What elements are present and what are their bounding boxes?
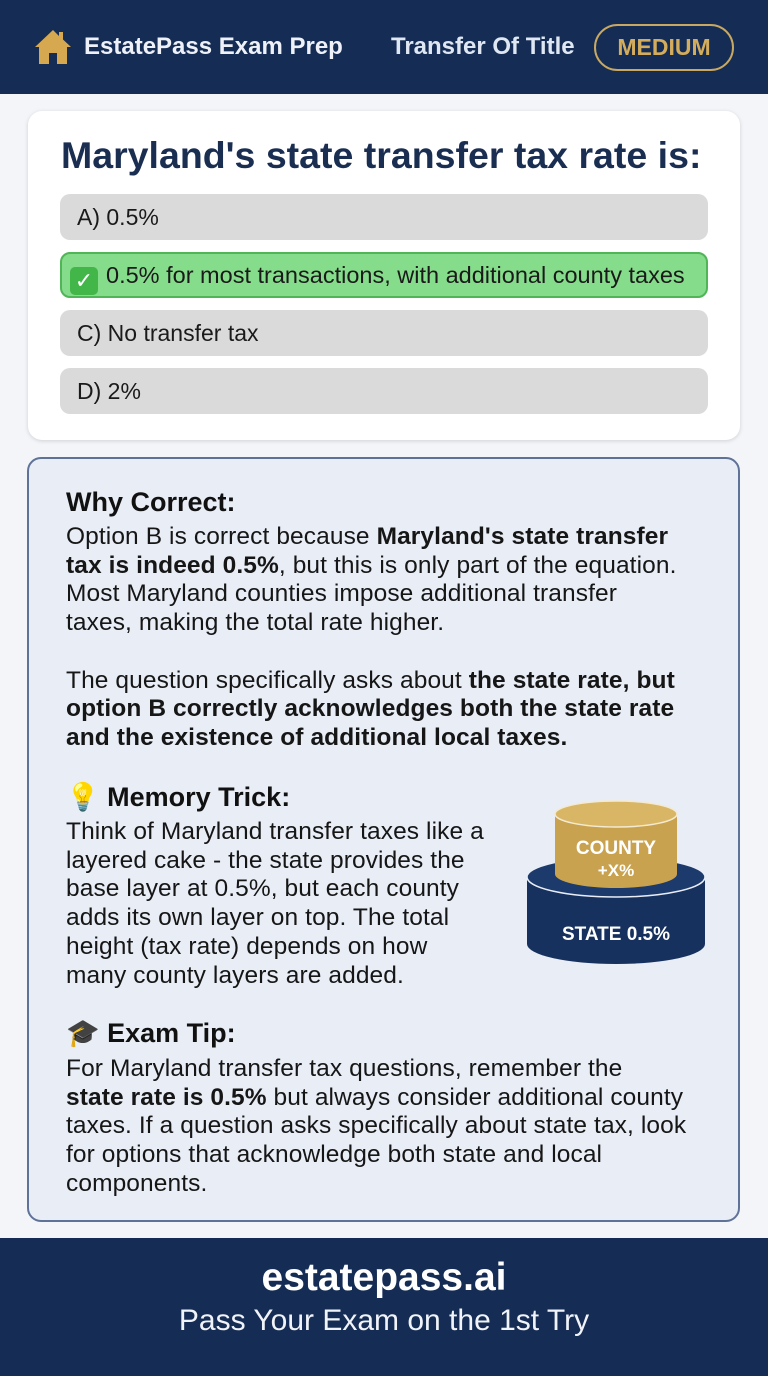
- exam tip text: For Maryland transfer tax questions, remember the: [66, 1055, 622, 1082]
- why correct heading: Why Correct:: [66, 487, 236, 517]
- option B correct: 0.5% for most transactions, with additional county taxes: [106, 262, 685, 288]
- memory trick text: layered cake - the state provides the: [66, 847, 465, 874]
- question title: Maryland's state transfer tax rate is:: [61, 134, 701, 176]
- option A: A) 0.5%: [77, 204, 159, 230]
- cake diagram: COUNTY: [576, 838, 656, 859]
- memory trick text: adds its own layer on top. The total: [66, 904, 449, 931]
- brand name: EstatePass Exam Prep: [84, 33, 343, 60]
- memory trick text: [66, 818, 484, 989]
- explanation panel: [27, 457, 740, 1222]
- memory trick text: Think of Maryland transfer taxes like a: [66, 818, 484, 845]
- why correct text: taxes, making the total rate higher.: [66, 609, 444, 636]
- difficulty badge: [594, 24, 734, 71]
- question card: [28, 111, 740, 440]
- option C: C) No transfer tax: [77, 320, 258, 346]
- option D: D) 2%: [77, 378, 141, 404]
- exam tip text: [66, 1055, 686, 1197]
- why correct text: Option B is correct because Maryland's state transfer: [66, 523, 668, 550]
- why correct text: [66, 523, 676, 751]
- icon: house: [35, 30, 71, 64]
- why correct text: and the existence of additional local taxes.: [66, 724, 567, 751]
- topic: Transfer Of Title: [391, 33, 575, 60]
- why correct text: tax is indeed 0.5%, but this is only part of the equation.: [66, 552, 676, 579]
- cake diagram: +X%: [598, 861, 634, 880]
- memory trick text: many county layers are added.: [66, 962, 404, 989]
- why correct text: The question specifically asks about the state rate, but: [66, 667, 675, 694]
- memory trick heading: 💡 Memory Trick:: [66, 782, 290, 812]
- footer: [0, 1238, 768, 1376]
- why correct text: Most Maryland counties impose additional transfer: [66, 580, 617, 607]
- header bar: [0, 0, 768, 94]
- memory trick text: height (tax rate) depends on how: [66, 933, 427, 960]
- footer tagline: Pass Your Exam on the 1st Try: [179, 1304, 589, 1337]
- exam tip text: taxes. If a question asks specifically about state tax, look: [66, 1112, 686, 1139]
- option B correct: ✓: [75, 268, 93, 293]
- exam tip text: for options that acknowledge both state and local: [66, 1141, 602, 1168]
- exam tip text: components.: [66, 1170, 207, 1197]
- footer site: estatepass.ai: [262, 1256, 506, 1299]
- option A: [60, 194, 708, 240]
- option D: [60, 368, 708, 414]
- why correct text: option B correctly acknowledges both the state rate: [66, 695, 674, 722]
- cake diagram: [527, 800, 705, 964]
- memory trick text: base layer at 0.5%, but each county: [66, 875, 459, 902]
- exam tip heading: 🎓 Exam Tip:: [66, 1018, 236, 1048]
- option B correct: [60, 252, 708, 298]
- option C: [60, 310, 708, 356]
- exam tip text: state rate is 0.5% but always consider additional county: [66, 1084, 683, 1111]
- cake diagram: STATE 0.5%: [562, 924, 670, 945]
- difficulty badge: MEDIUM: [617, 34, 711, 60]
